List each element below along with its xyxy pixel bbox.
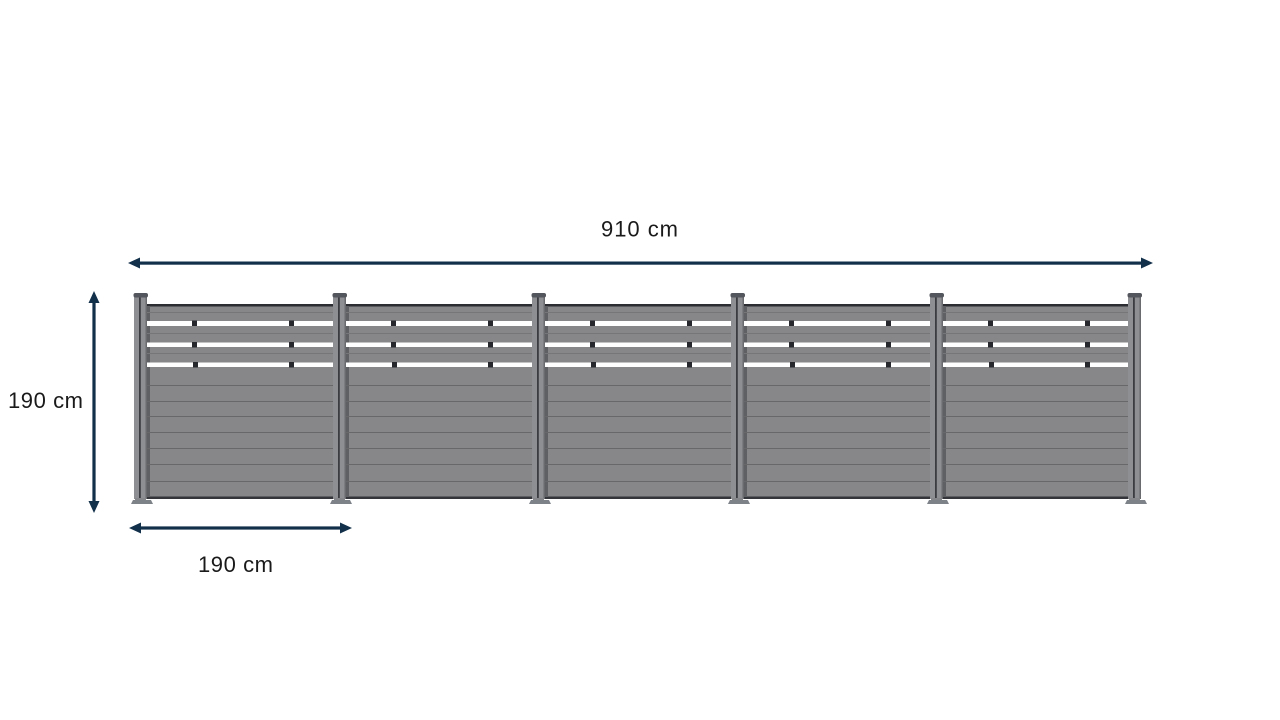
fence post 6 bbox=[1125, 293, 1147, 504]
fence post 1 bbox=[131, 293, 153, 504]
fence: five panels with six posts bbox=[131, 293, 1147, 504]
fence panel 3 bbox=[545, 304, 731, 499]
dimension label: panel width: 190 cm bbox=[198, 552, 273, 577]
arrow: panel width bbox=[129, 522, 352, 534]
fence post 3 bbox=[529, 293, 551, 504]
fence panel 1 bbox=[147, 304, 333, 499]
arrow: height bbox=[88, 291, 100, 513]
fence panel 5 bbox=[943, 304, 1129, 499]
fence panel 2 bbox=[346, 304, 532, 499]
arrow: total width bbox=[128, 258, 1153, 268]
fence panel 4 bbox=[744, 304, 930, 499]
fence post 5 bbox=[927, 293, 949, 504]
fence post 4 bbox=[728, 293, 750, 504]
fence post 2 bbox=[330, 293, 352, 504]
dimension label: height: 190 cm bbox=[8, 388, 83, 413]
dimension label: total width: 910 cm bbox=[601, 216, 678, 242]
